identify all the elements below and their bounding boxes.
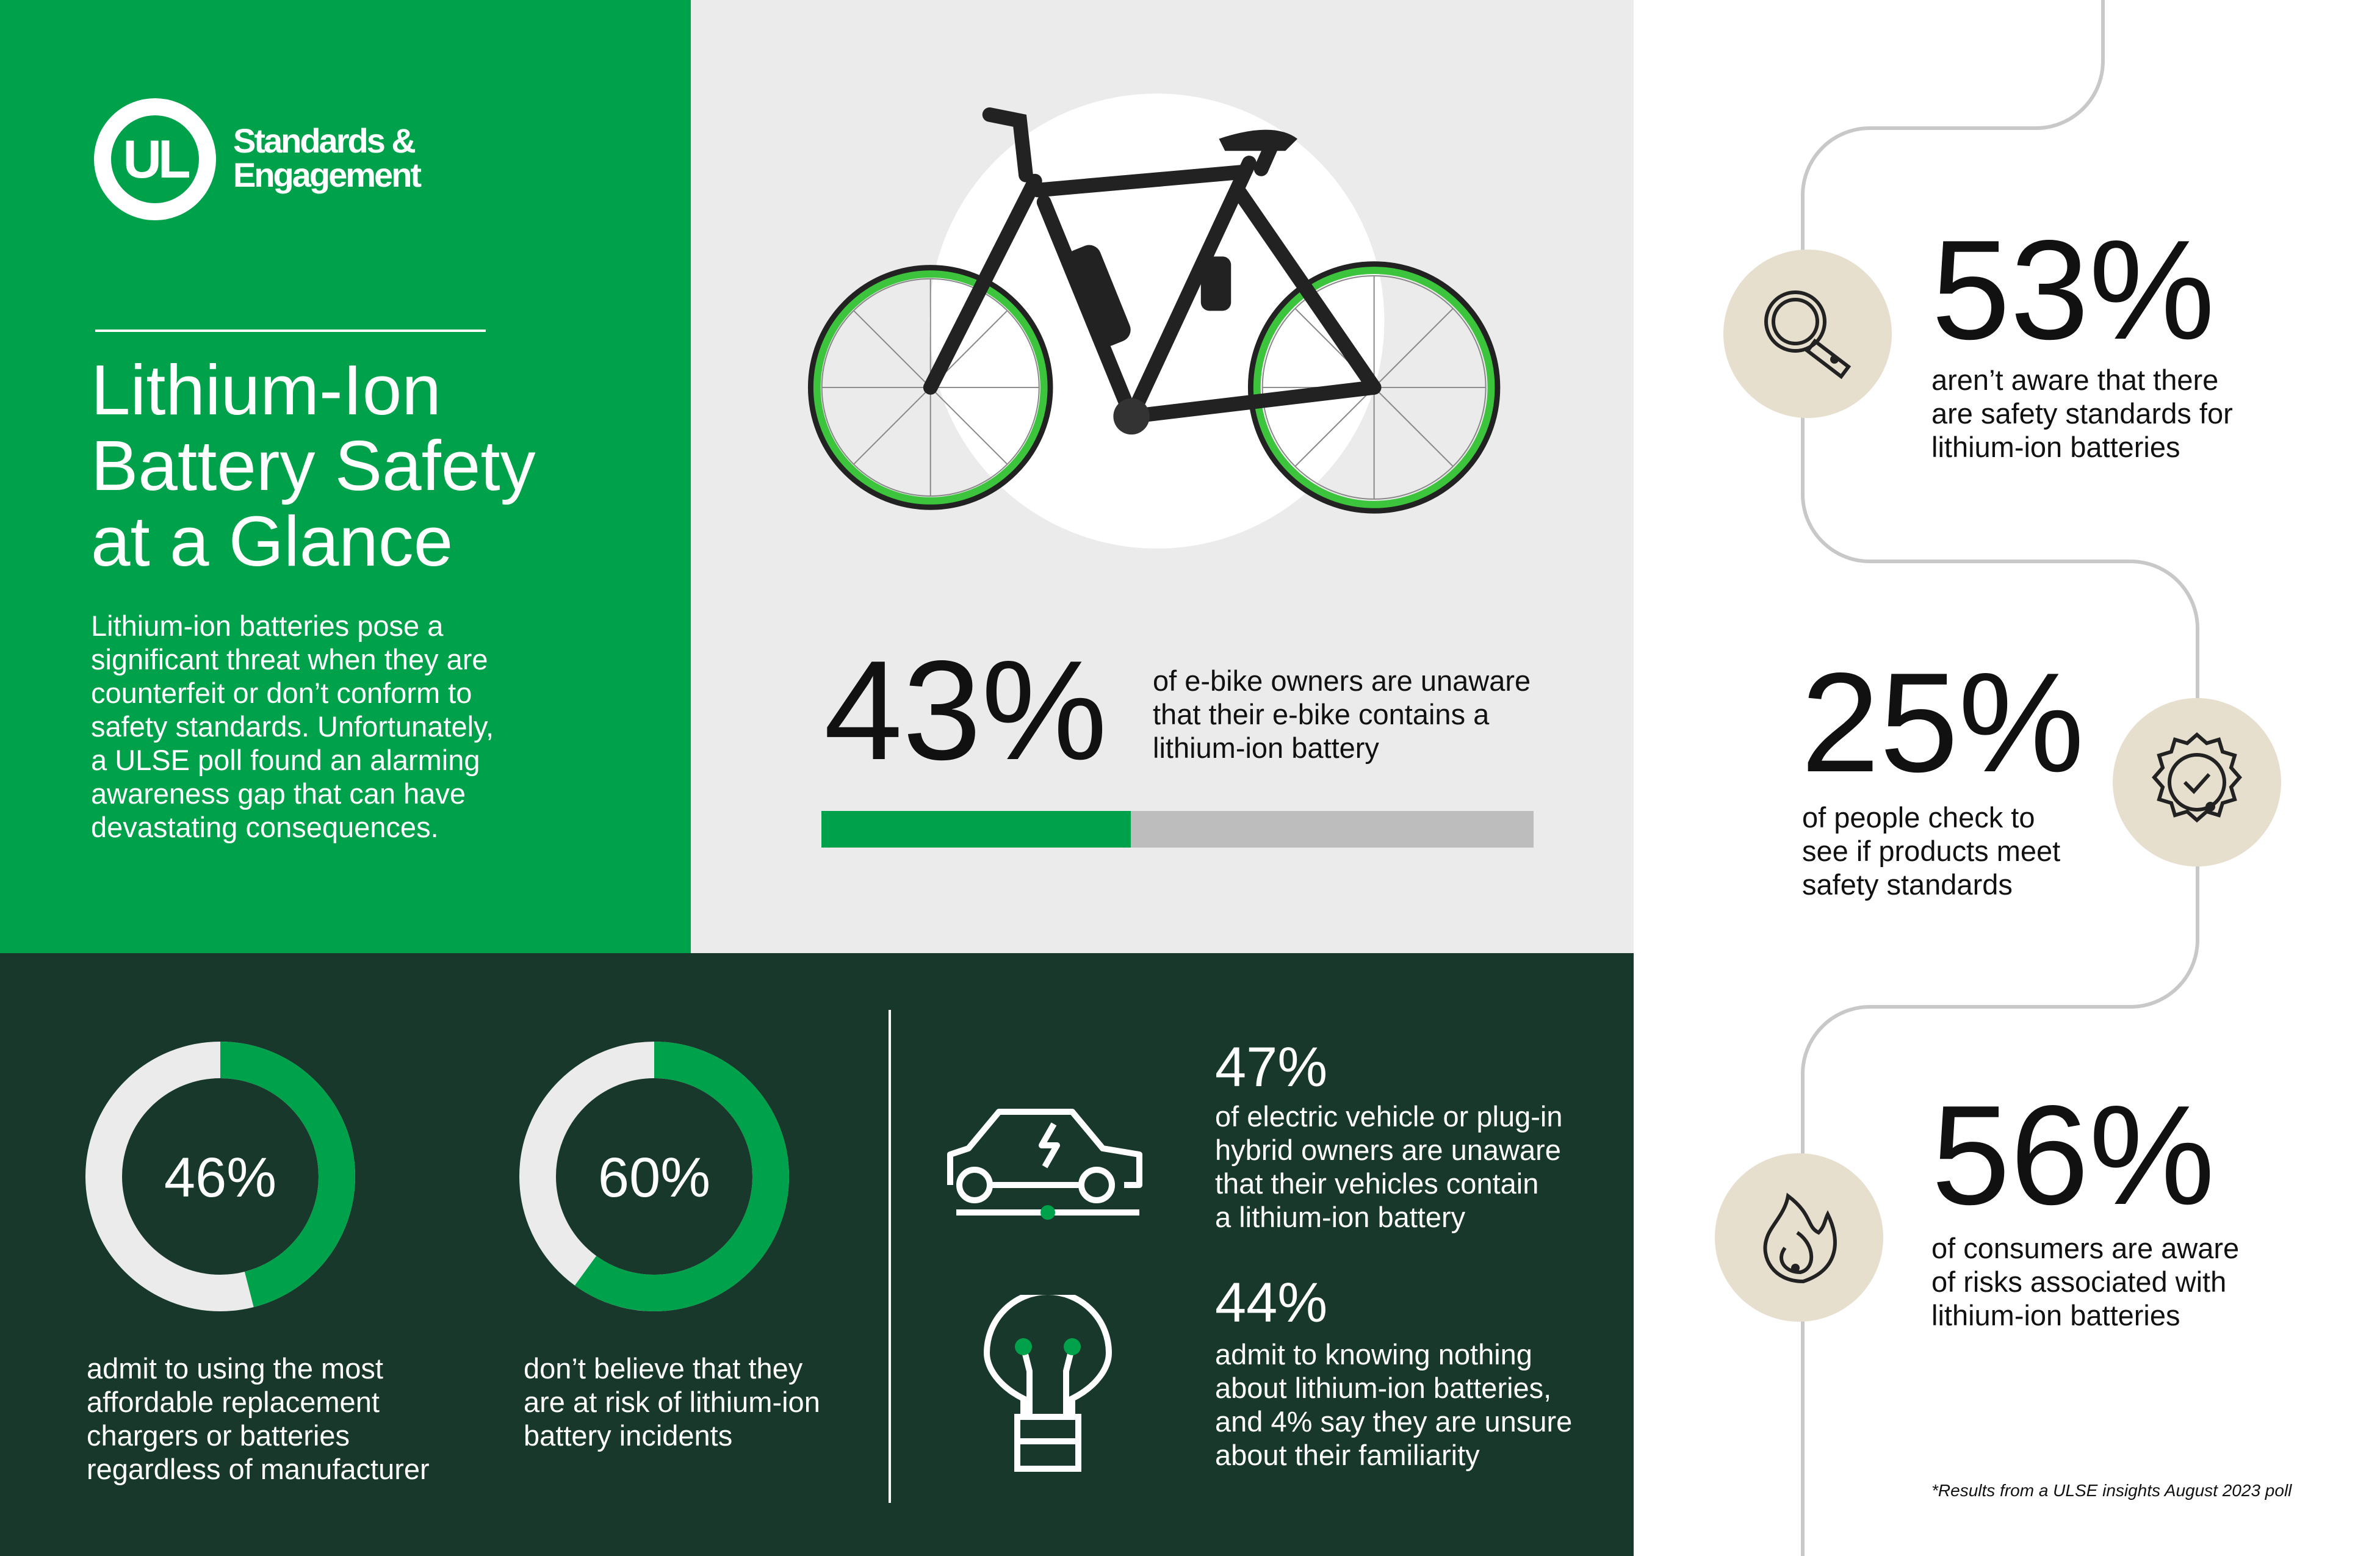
title	[91, 350, 536, 581]
caption 47%: of electric vehicle or plug-in	[1215, 1100, 1562, 1133]
intro text: significant threat when they are	[91, 643, 488, 675]
caption 53%: lithium-ion batteries	[1931, 431, 2180, 463]
caption 44%	[1215, 1338, 1572, 1471]
title: at a Glance	[91, 502, 453, 581]
caption 53%	[1931, 364, 2233, 463]
donut 60%: 60%	[598, 1147, 710, 1209]
panel: e-bike stat	[691, 0, 1634, 953]
icon: UL circle	[94, 98, 216, 220]
intro text: Lithium-ion batteries pose a	[91, 610, 443, 642]
stat 43%: 43%	[824, 632, 1107, 790]
donut 46%: 46%	[164, 1147, 276, 1209]
caption 56%: of consumers are aware	[1931, 1232, 2239, 1264]
caption 47%: hybrid owners are unaware	[1215, 1134, 1561, 1166]
caption 47%: that their vehicles contain	[1215, 1167, 1538, 1200]
bike illustration	[808, 93, 1500, 549]
panel: dark stats	[0, 953, 1634, 1556]
stat 56%: 56%	[1931, 1076, 2215, 1234]
caption 44%: about their familiarity	[1215, 1439, 1480, 1471]
caption 47%	[1215, 1100, 1562, 1233]
icon: UL circle: UL	[123, 129, 187, 189]
stat 44%: 44%	[1215, 1272, 1327, 1334]
caption 46%	[87, 1352, 430, 1485]
caption 56%: lithium-ion batteries	[1931, 1299, 2180, 1331]
logo text: Standards &	[233, 121, 414, 160]
icon: badge check	[2113, 698, 2281, 866]
icon: flame	[1715, 1153, 1883, 1322]
caption 60%	[524, 1352, 820, 1452]
caption 46%: regardless of manufacturer	[87, 1453, 430, 1485]
caption 60%: don’t believe that they	[524, 1352, 802, 1385]
caption 53%: are safety standards for	[1931, 397, 2233, 430]
stat 25%: 25%	[1801, 644, 2084, 802]
intro text	[91, 610, 494, 843]
caption 25%: safety standards	[1802, 868, 2013, 901]
caption 53%: aren’t aware that there	[1931, 364, 2218, 396]
caption 60%: battery incidents	[524, 1419, 732, 1452]
intro text: safety standards. Unfortunately,	[91, 710, 494, 743]
panel: green intro	[0, 0, 691, 953]
caption 46%: affordable replacement	[87, 1386, 380, 1418]
intro text: awareness gap that can have	[91, 777, 466, 810]
icon: magnifier	[1723, 250, 1892, 418]
title: Lithium-Ion	[91, 350, 441, 430]
intro text: a ULSE poll found an alarming	[91, 744, 480, 776]
logo	[94, 98, 421, 220]
logo text: Engagement	[233, 156, 420, 194]
caption 44%: admit to knowing nothing	[1215, 1338, 1532, 1371]
caption 44%: about lithium-ion batteries,	[1215, 1372, 1551, 1404]
caption 56%	[1931, 1232, 2239, 1331]
caption 25%: see if products meet	[1802, 835, 2060, 867]
stat text	[1153, 665, 1531, 764]
caption 46%: chargers or batteries	[87, 1419, 350, 1452]
title: Battery Safety	[91, 426, 536, 505]
stat text: lithium-ion battery	[1153, 732, 1379, 764]
caption 47%: a lithium-ion battery	[1215, 1201, 1465, 1233]
caption 56%: of risks associated with	[1931, 1266, 2226, 1298]
icon: electric car	[947, 1109, 1142, 1220]
caption 44%: and 4% say they are unsure	[1215, 1405, 1572, 1438]
intro text: devastating consequences.	[91, 811, 439, 843]
logo text	[233, 121, 421, 194]
caption 60%: are at risk of lithium-ion	[524, 1386, 820, 1418]
caption 25%	[1802, 801, 2060, 901]
intro text: counterfeit or don’t conform to	[91, 677, 472, 709]
stat text: of e-bike owners are unaware	[1153, 665, 1531, 697]
stat 47%: 47%	[1215, 1036, 1327, 1098]
donut 60%	[519, 1042, 789, 1311]
stat text: that their e-bike contains a	[1153, 698, 1489, 730]
caption 25%: of people check to	[1802, 801, 2035, 834]
progress bar	[821, 811, 1534, 848]
donut 46%	[85, 1042, 355, 1311]
footnote: *Results from a ULSE insights August 2023 poll	[1931, 1481, 2292, 1500]
icon: light bulb	[984, 1295, 1112, 1472]
stat 53%: 53%	[1931, 211, 2215, 369]
caption 46%: admit to using the most	[87, 1352, 383, 1385]
